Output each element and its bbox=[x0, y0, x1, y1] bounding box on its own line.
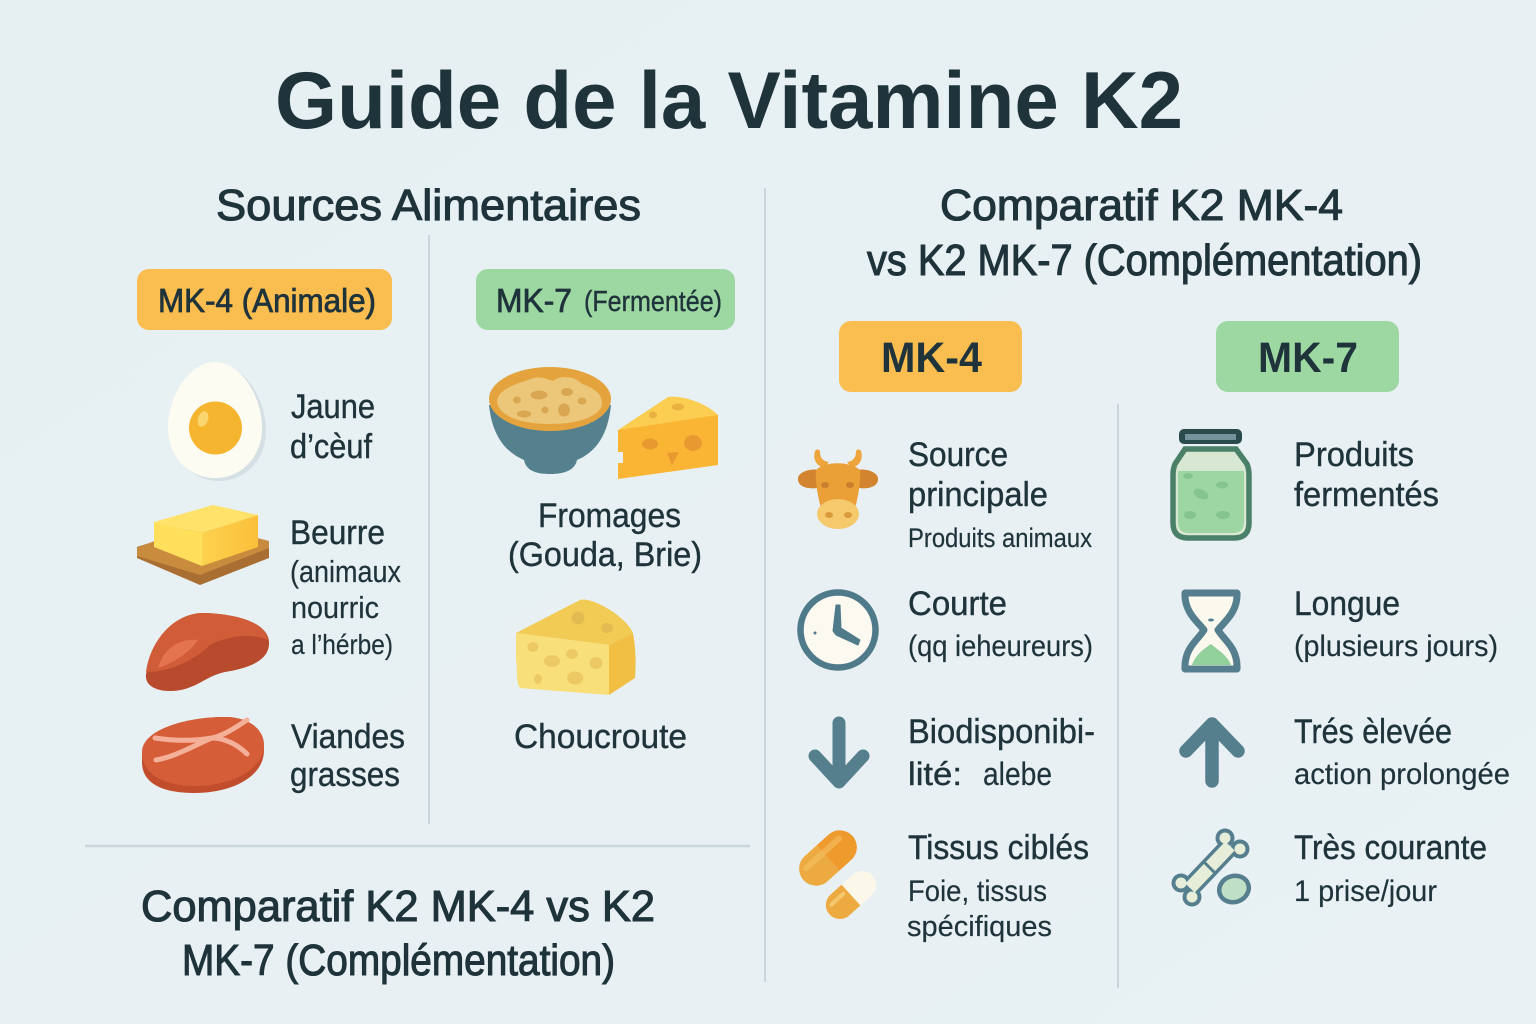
icon: steak bbox=[142, 717, 264, 793]
label: choucroute: Choucroute bbox=[514, 718, 687, 756]
label: jaune d'oeuf bbox=[290, 388, 375, 466]
icon: yellow cheese wedge bbox=[516, 599, 636, 695]
label: viandes grasses bbox=[290, 718, 405, 794]
icon: jar bbox=[1173, 429, 1249, 538]
label: beurre: a l’hérbe) bbox=[291, 629, 393, 660]
text: biodisponibilite: lité: bbox=[908, 756, 962, 792]
icon: arrow up bbox=[1186, 724, 1238, 781]
icon: liver meat bbox=[146, 613, 269, 691]
badge: MK-4 bbox=[839, 321, 1022, 392]
label: fromages: Fromages bbox=[538, 497, 681, 535]
text: courte: Courte bbox=[908, 585, 1007, 623]
icon: cow bbox=[798, 450, 878, 529]
label: beurre bbox=[290, 514, 401, 660]
heading: comparatif droite: Comparatif K2 MK-4 bbox=[940, 181, 1343, 230]
label: beurre: (animaux bbox=[290, 554, 401, 589]
text: tissus cibles bbox=[907, 829, 1089, 943]
title: Guide de la Vitamine K2 bbox=[275, 56, 1183, 146]
badge: MK-7: MK-7 bbox=[1258, 334, 1358, 382]
text: source principale bbox=[908, 436, 1092, 553]
panel: sources alimentaires bbox=[137, 181, 735, 985]
text: courte bbox=[908, 585, 1093, 663]
text: tres courante: 1 prise/jour bbox=[1294, 875, 1437, 908]
heading: comparatif bas: Comparatif K2 MK-4 vs K2 bbox=[141, 882, 655, 931]
icon: bone and tablet bbox=[1172, 828, 1253, 906]
text: produits fermentes bbox=[1294, 436, 1439, 514]
icon: orange cheese wedge bbox=[618, 397, 718, 479]
badge: MK-4 animale: MK-4 (Animale) bbox=[158, 282, 376, 319]
label: beurre: nourric bbox=[291, 590, 379, 625]
heading: comparatif droite bbox=[867, 181, 1422, 285]
text: tres elevee: action prolongée bbox=[1294, 758, 1510, 791]
badge: MK-7 bbox=[1216, 321, 1399, 392]
text: tres elevee: Trés èlevée bbox=[1294, 713, 1452, 751]
label: viandes grasses: Viandes bbox=[291, 718, 405, 756]
text: biodisponibilite: alebe bbox=[983, 756, 1052, 792]
label: viandes grasses: grasses bbox=[290, 756, 400, 794]
text: tissus cibles: Tissus ciblés bbox=[908, 829, 1089, 867]
badge: MK-7 fermentee: (Fermentée) bbox=[584, 286, 722, 318]
label: fromages: (Gouda, Brie) bbox=[508, 536, 702, 574]
text: source principale: Source bbox=[908, 436, 1008, 474]
text: courte: (qq ieheureurs) bbox=[908, 630, 1093, 663]
text: biodisponibilite bbox=[908, 713, 1095, 792]
text: produits fermentes: fermentés bbox=[1294, 476, 1439, 514]
icon: capsules bbox=[792, 823, 882, 925]
text: tres elevee bbox=[1294, 713, 1510, 791]
icon: egg bbox=[168, 362, 266, 481]
icon: clock bbox=[800, 592, 876, 668]
icon: arrow down bbox=[815, 723, 863, 782]
text: produits fermentes: Produits bbox=[1294, 436, 1414, 474]
label: jaune d'oeuf: Jaune bbox=[291, 388, 375, 426]
text: source principale: Produits animaux bbox=[908, 523, 1092, 553]
icon: bowl of sauerkraut bbox=[489, 367, 611, 474]
heading: comparatif bas bbox=[141, 882, 655, 985]
label: jaune d'oeuf: d’cèuf bbox=[290, 428, 372, 466]
badge: MK-7 fermentee: MK-7 bbox=[496, 282, 572, 319]
text: tres courante bbox=[1294, 829, 1487, 908]
label: fromages bbox=[508, 497, 702, 574]
text: biodisponibilite: Biodisponibi- bbox=[908, 713, 1095, 751]
icon: butter bbox=[137, 505, 269, 585]
heading: sources alimentaires: Sources Alimentaires bbox=[216, 181, 641, 230]
text: longue: Longue bbox=[1294, 585, 1400, 623]
text: tissus cibles: Foie, tissus bbox=[908, 875, 1047, 908]
text: tres courante: Très courante bbox=[1294, 829, 1487, 867]
text: tissus cibles: spécifiques bbox=[907, 911, 1052, 943]
text: source principale: principale bbox=[908, 476, 1048, 514]
text: longue: (plusieurs jours) bbox=[1294, 630, 1498, 663]
panel: comparatif bbox=[792, 181, 1510, 943]
badge: MK-4: MK-4 bbox=[881, 334, 982, 382]
badge: MK-7 fermentee bbox=[476, 269, 735, 330]
badge: MK-4 animale bbox=[137, 269, 392, 330]
text: longue bbox=[1294, 585, 1498, 663]
heading: comparatif droite: vs K2 MK-7 (Complémentation) bbox=[867, 236, 1422, 285]
heading: comparatif bas: MK-7 (Complémentation) bbox=[182, 936, 615, 985]
label: beurre: Beurre bbox=[290, 514, 385, 552]
icon: hourglass bbox=[1185, 593, 1237, 669]
